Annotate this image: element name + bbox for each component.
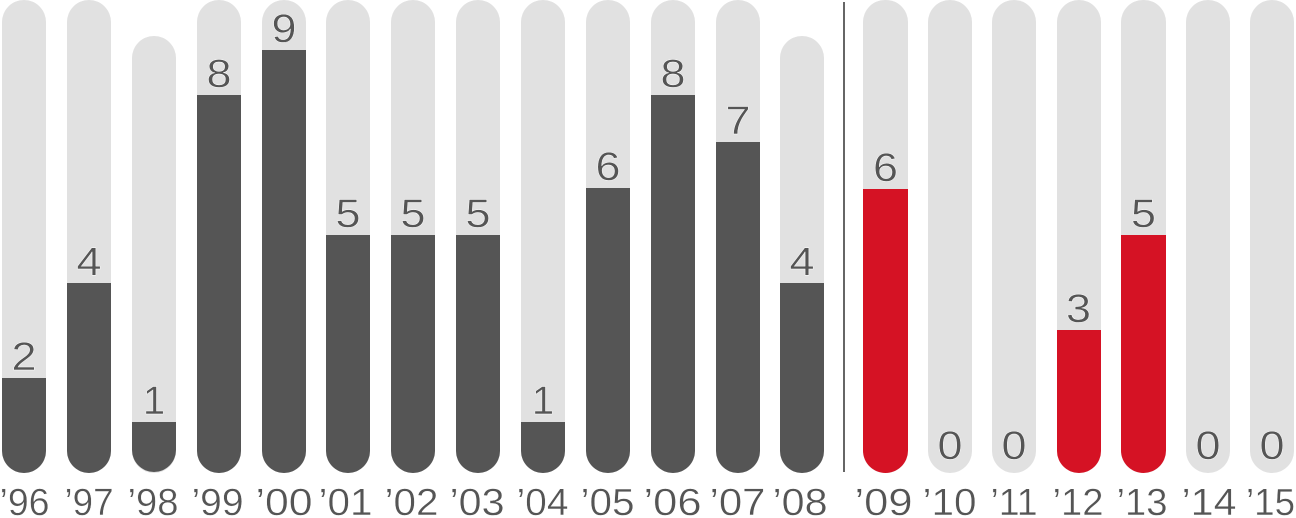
- bar: 2009 value 6: 6: [873, 146, 898, 190]
- bar: 2013 value 5: [1116, 0, 1168, 518]
- bar: 2012 value 3: 3: [1066, 287, 1091, 331]
- bar: 2010 value 0: 0: [938, 424, 962, 468]
- bar: 2015 value 0: [1246, 0, 1295, 518]
- bar: 2003 value 5: [450, 0, 504, 518]
- bar: 2004 value 1: 1: [532, 379, 554, 423]
- bar: 1996 value 2: 2: [12, 335, 36, 379]
- bar: 2005 value 6: [580, 0, 634, 518]
- bar: 2014 value 0: 0: [1196, 424, 1220, 468]
- bar: 2000 value 9: [256, 0, 312, 518]
- bar: 2008 value 4: [772, 36, 828, 518]
- bar: 1997 value 4: [64, 0, 114, 518]
- bar: 2014 value 0: [1182, 0, 1236, 518]
- bar: 1998 value 1: 1: [143, 379, 165, 423]
- bar: 2006 value 8: 8: [660, 52, 686, 96]
- bar: 2005 value 6: 6: [596, 145, 620, 189]
- bar: 2008 value 4: 4: [790, 240, 814, 284]
- bar: 2009 value 6: [854, 0, 912, 518]
- bar: 1999 value 8: [192, 0, 244, 518]
- bar: 2011 value 0: 0: [1002, 424, 1026, 468]
- divider between 2008 and 2009: [843, 2, 845, 472]
- bar: 2002 value 5: [384, 0, 438, 518]
- bar: 2007 value 7: [710, 0, 766, 518]
- bar: 2006 value 8: [644, 0, 702, 518]
- bar: 1999 value 8: 8: [206, 52, 232, 96]
- bar: 1997 value 4: 4: [76, 240, 102, 284]
- bar: 2004 value 1: [516, 0, 568, 518]
- bar: 1998 value 1: [128, 36, 178, 518]
- bar: 2011 value 0: [990, 0, 1038, 518]
- bar: 2002 value 5: 5: [400, 192, 426, 236]
- bar: 2001 value 5: 5: [336, 192, 360, 236]
- bar: 1996 value 2: [0, 0, 50, 518]
- bar: 2003 value 5: 5: [466, 192, 490, 236]
- bar: 2015 value 0: 0: [1260, 424, 1284, 468]
- bar: 2013 value 5: 5: [1131, 192, 1156, 236]
- bar: 2001 value 5: [318, 0, 372, 518]
- bar: 2000 value 9: 9: [272, 7, 296, 51]
- bar: 2007 value 7: 7: [726, 99, 750, 143]
- bar: 2012 value 3: [1052, 0, 1104, 518]
- bar: 2010 value 0: [922, 0, 976, 518]
